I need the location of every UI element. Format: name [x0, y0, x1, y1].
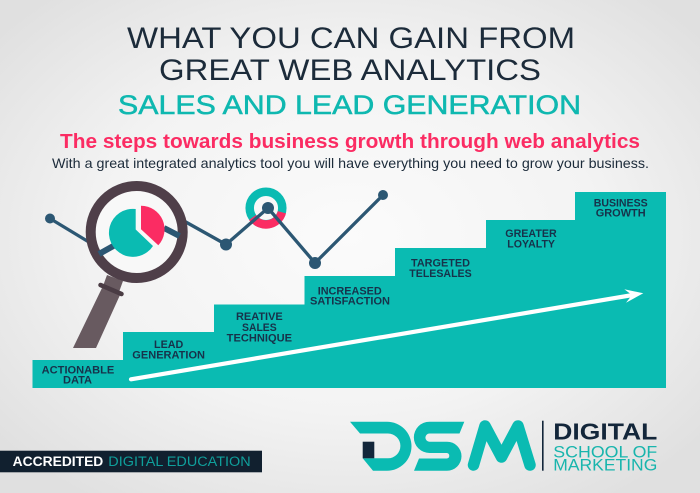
pie chart	[109, 209, 153, 257]
letter M	[474, 426, 530, 465]
step labels: ACTIONABLE	[42, 364, 114, 376]
icon: ring chart	[250, 192, 282, 224]
line chart	[45, 190, 388, 269]
logo: DSM: SCHOOL OF	[553, 442, 657, 461]
title: WHAT YOU CAN GAIN FROM	[127, 22, 575, 55]
step labels: TELESALES	[409, 268, 472, 280]
logo: DSM: MARKETING	[553, 456, 657, 475]
heading: steps towards business growth: The steps towards business growth through web analytics	[60, 130, 640, 153]
letter S	[414, 422, 464, 471]
step labels: BUSINESS	[594, 198, 648, 210]
title	[127, 22, 575, 87]
step labels: SALES	[242, 322, 277, 334]
lens	[91, 186, 183, 278]
letter D	[350, 422, 411, 471]
divider	[542, 421, 544, 471]
wordmark: DIGITAL	[553, 418, 657, 444]
step labels: REATIVE	[236, 311, 283, 323]
line through lens	[99, 228, 180, 254]
step labels: TECHNIQUE	[227, 333, 292, 345]
badge: accredited digital education	[0, 451, 262, 472]
badge: accredited digital education: DIGITAL EDUCATION	[108, 454, 251, 469]
step labels: DATA	[63, 375, 92, 387]
logo: DSM	[350, 418, 657, 475]
handle	[103, 275, 123, 292]
step labels: GREATER	[505, 228, 557, 240]
step labels: TARGETED	[411, 258, 470, 270]
step labels	[42, 198, 648, 387]
step labels: GROWTH	[596, 208, 646, 220]
arrow: growth trend	[131, 289, 643, 379]
step labels: LOYALTY	[507, 239, 556, 251]
text block: intro sentence: With a great integrated analytics tool you will have everything you need to grow your business.	[52, 155, 649, 171]
staircase chart	[32, 192, 666, 388]
subtitle: sales and lead generation: SALES AND LEAD GENERATION	[118, 90, 581, 120]
step labels: LEAD	[154, 339, 183, 351]
icon: magnifying glass	[73, 186, 183, 348]
step labels: SATISFACTION	[310, 296, 390, 308]
badge: accredited digital education: ACCREDITED	[13, 454, 104, 469]
step labels: GENERATION	[132, 350, 205, 362]
title: GREAT WEB ANALYTICS	[159, 54, 541, 87]
step labels: INCREASED	[318, 286, 382, 298]
